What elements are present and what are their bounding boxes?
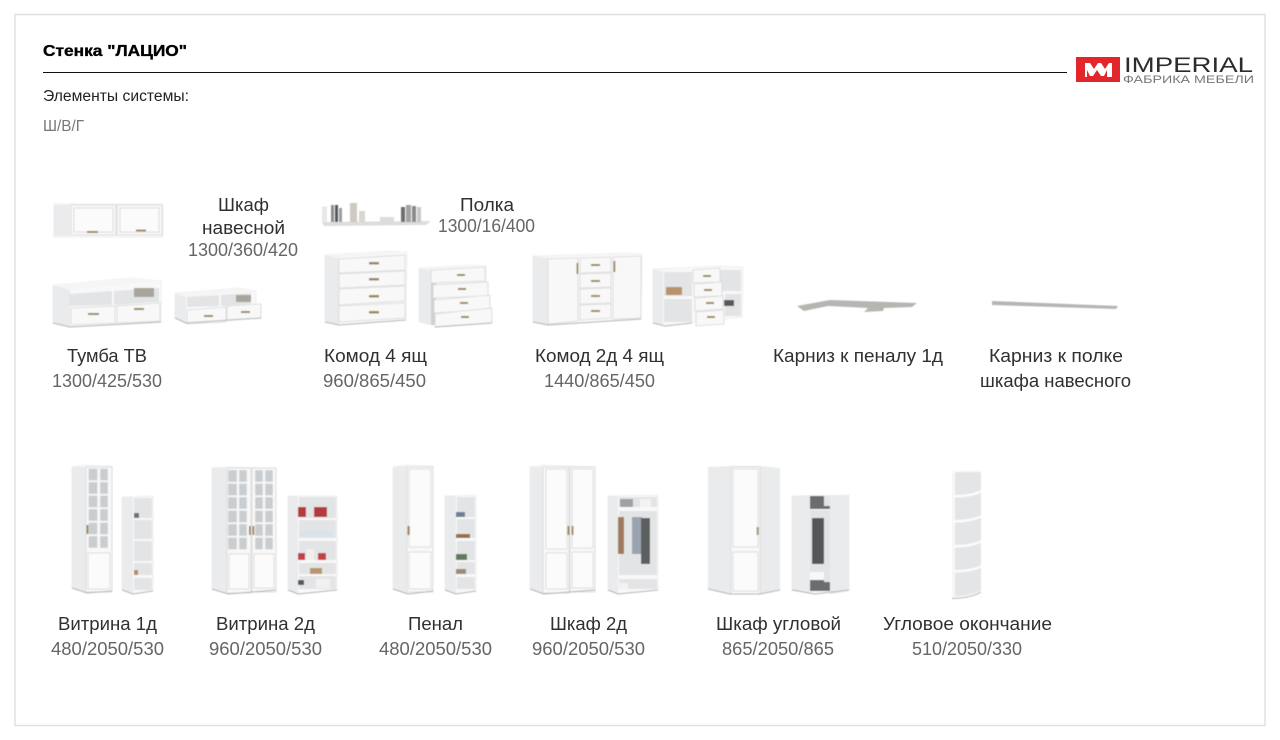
- shelf drawing: [322, 203, 431, 226]
- item: corner wardrobe: [708, 466, 849, 659]
- chest closed: [325, 251, 407, 325]
- item: wall cabinet: [54, 195, 298, 260]
- shelf cornice name: Карниз к полке: [989, 346, 1123, 366]
- title: Стенка "ЛАЦИО": [43, 43, 187, 60]
- item: corner end unit: [883, 470, 1052, 659]
- logo tagline: ФАБРИКА МЕБЕЛИ: [1123, 74, 1254, 86]
- wardrobe name: Шкаф 2д: [550, 614, 628, 634]
- tall cabinet size: 480/2050/530: [379, 639, 492, 659]
- item: shelf: [322, 195, 535, 236]
- cornice name: Карниз к пеналу 1д: [773, 346, 944, 366]
- chest with doors size: 1440/865/450: [544, 371, 655, 391]
- display cabinet open: [122, 496, 153, 594]
- item: cornice for single-door cabinet: [773, 300, 944, 366]
- display cabinet size: 480/2050/530: [51, 639, 164, 659]
- tall cabinet open: [445, 495, 476, 594]
- chest with doors open: [653, 266, 743, 326]
- corner wardrobe size: 865/2050/865: [722, 639, 834, 659]
- wardrobe open: [608, 495, 658, 594]
- corner wardrobe closed: [708, 466, 780, 594]
- header rule: [43, 72, 1067, 73]
- two-door display size: 960/2050/530: [209, 639, 322, 659]
- cornice drawing: [797, 300, 917, 312]
- chest size: 960/865/450: [323, 371, 426, 391]
- wall cabinet name: Шкаф: [218, 195, 269, 215]
- logo: Imperial: [1076, 54, 1254, 86]
- two-door display closed: [212, 467, 276, 594]
- corner wardrobe name: Шкаф угловой: [716, 614, 841, 634]
- two-door display name: Витрина 2д: [216, 614, 316, 634]
- item: TV stand: [52, 278, 261, 391]
- chest with doors name: Комод 2д 4 ящ: [535, 346, 664, 366]
- tall cabinet name: Пенал: [408, 614, 463, 634]
- item: one-door display cabinet: [51, 465, 164, 659]
- wall cabinet size: 1300/360/420: [188, 240, 298, 260]
- item: cornice for wall cabinet shelf: [980, 301, 1131, 391]
- item: two-door display cabinet: [209, 467, 337, 659]
- corner wardrobe open: [792, 495, 849, 594]
- logo wordmark: IMPERIAL: [1124, 54, 1253, 77]
- tall cabinet closed: [393, 465, 433, 594]
- end unit name: Угловое окончание: [883, 614, 1052, 634]
- end unit drawing: [952, 470, 981, 599]
- TV stand size: 1300/425/530: [52, 371, 162, 391]
- item: 4-drawer chest: [323, 251, 492, 391]
- item: chest with 2 doors and 4 drawers: [533, 253, 743, 391]
- shelf cornice name line 2: шкафа навесного: [980, 371, 1131, 391]
- TV stand name: Тумба ТВ: [67, 346, 147, 366]
- TV stand closed: [53, 278, 161, 327]
- display cabinet closed: [72, 465, 112, 593]
- two-door display open: [288, 496, 337, 594]
- display cabinet name: Витрина 1д: [58, 614, 158, 634]
- dimension key: Ш/В/Г: [43, 118, 85, 135]
- shelf name: Полка: [460, 195, 515, 215]
- subtitle: Элементы системы:: [43, 88, 189, 105]
- chest with doors closed: [533, 253, 642, 325]
- chest name: Комод 4 ящ: [324, 346, 427, 366]
- wall cabinet drawing: [54, 204, 163, 237]
- end unit size: 510/2050/330: [912, 639, 1022, 659]
- item: tall cabinet: [379, 465, 492, 659]
- TV stand open: [175, 288, 261, 324]
- chest open: [419, 265, 492, 327]
- wardrobe closed: [530, 465, 595, 594]
- wall cabinet type: навесной: [202, 218, 285, 238]
- shelf cornice drawing: [992, 301, 1118, 309]
- wardrobe size: 960/2050/530: [532, 639, 645, 659]
- shelf size: 1300/16/400: [438, 216, 535, 236]
- item: two-door wardrobe: [530, 465, 658, 659]
- logo mark: [1076, 57, 1120, 82]
